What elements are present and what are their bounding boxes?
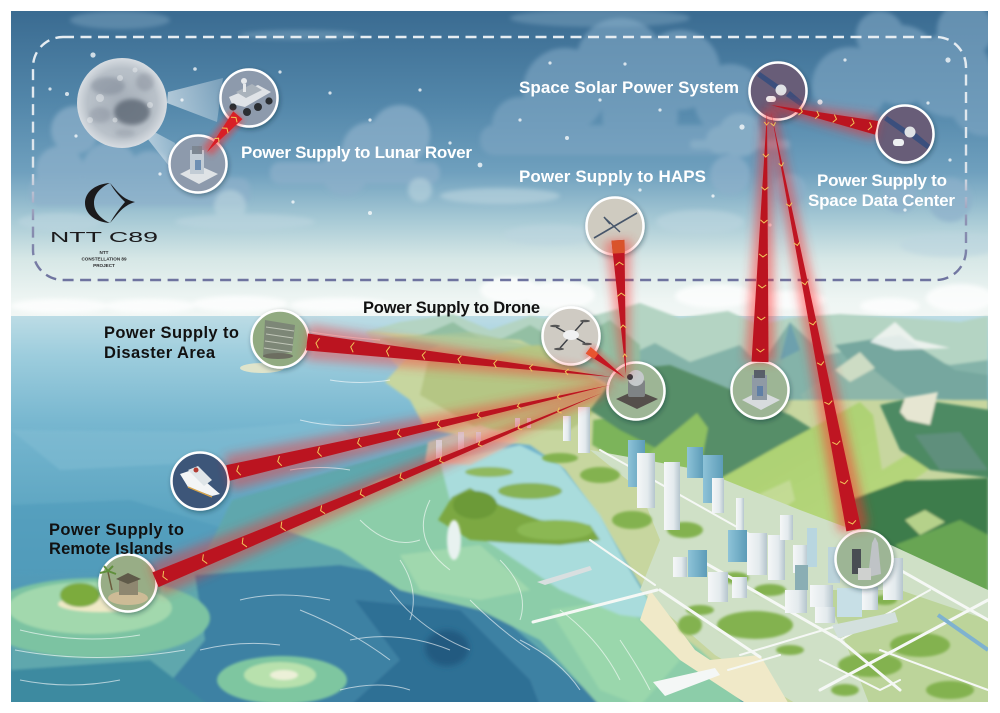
beam: ground station to drone (584, 345, 629, 384)
beam: HAPS (605, 239, 639, 376)
waves (15, 330, 650, 690)
left island shallows (0, 578, 210, 658)
sky (11, 11, 988, 321)
convention building (832, 612, 898, 638)
label: Power Supply to Disaster Area: Power Supply to (104, 324, 239, 342)
logo subtitle: NTT (100, 250, 109, 255)
stars (48, 52, 952, 227)
icon: space solar power satellite (750, 62, 806, 120)
logo mark (85, 183, 135, 223)
beam: satellite to space data center (768, 93, 879, 140)
parks and trees (542, 453, 974, 699)
beam: ground station to remote island (149, 377, 609, 595)
icon: lunar power station (170, 136, 226, 192)
inlet and islets (425, 425, 660, 620)
beam: moon station to rover (201, 110, 244, 157)
label: Power Supply to Disaster Area: Disaster Area (104, 344, 216, 362)
logo subtitle: CONSTELLATION 89 (81, 256, 127, 262)
city buildings (436, 407, 903, 623)
river (938, 615, 988, 650)
upper clouds (18, 2, 1000, 257)
label: Power Supply to Remote Islands (49, 521, 184, 558)
icon: cruise ship (172, 452, 228, 510)
label: Power Supply to Remote Islands: Remote Islands (49, 540, 173, 558)
logo subtitle (81, 250, 127, 268)
city ground (590, 450, 988, 706)
beam: satellite to ground tower (745, 112, 782, 362)
icon: ground receiver tower (732, 362, 788, 418)
beam: ground station to disaster area (305, 324, 614, 395)
beam: satellite to city (756, 109, 868, 533)
icon: ground laser station (608, 362, 664, 420)
cones from moon (143, 78, 223, 180)
headland near disaster area (240, 363, 284, 373)
beam: ground station to cruise ship (224, 367, 614, 491)
label: Power Supply to Drone: Power Supply to Drone (363, 299, 540, 317)
label: Power Supply to Disaster Area (104, 324, 239, 362)
dashed space zone outline (33, 37, 966, 280)
icon: city skyscrapers (836, 530, 892, 588)
dark green mountains (590, 365, 990, 592)
logo wordmark: NTT C89 (50, 229, 158, 246)
city roads and piers (533, 450, 988, 690)
label: Power Supply to HAPS: Power Supply to HAPS (519, 167, 706, 186)
sea (11, 316, 988, 706)
deep water patch (425, 630, 469, 666)
waterfall and ship (447, 520, 592, 585)
icon: lunar rover (220, 70, 278, 126)
cruise terminal (653, 668, 720, 696)
moon (77, 58, 167, 148)
back mountains (366, 302, 988, 409)
icon: drone (542, 308, 600, 364)
logo subtitle: PROJECT (93, 263, 115, 268)
label: Power Supply to Space Data Center: Power Supply to (817, 171, 947, 190)
icon: disaster area building (252, 310, 308, 368)
shallow water bands (11, 420, 745, 706)
label: Power Supply to Space Data Center (808, 171, 955, 210)
bottom green island (217, 656, 347, 704)
icon: island house (100, 554, 156, 612)
label: Space Solar Power System: Space Solar Power System (519, 78, 739, 97)
logo: NTT C89 (50, 183, 158, 268)
horizon clouds (10, 277, 994, 314)
label: Power Supply to Lunar Rover: Power Supply to Lunar Rover (241, 143, 472, 162)
label: Power Supply to Remote Islands: Power Supply to (49, 521, 184, 539)
icon: space data center satellite (876, 106, 934, 162)
label: Power Supply to Space Data Center: Space Data Center (808, 191, 955, 210)
icon: HAPS aircraft (586, 198, 644, 254)
coastal land (368, 332, 988, 706)
